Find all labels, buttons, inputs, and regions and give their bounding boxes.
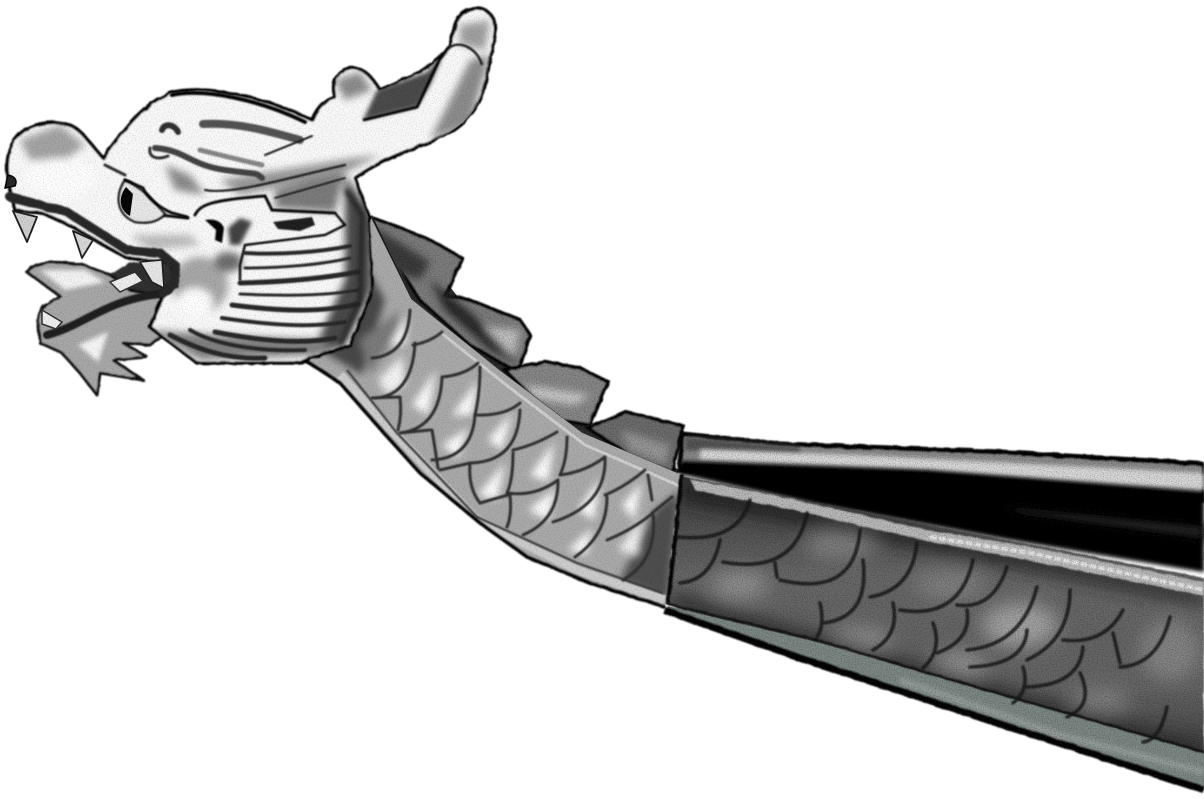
neck: scale boundary — [347, 370, 663, 593]
neck: upper trim — [440, 332, 682, 487]
head: horn tip seam — [450, 45, 482, 65]
head: forehead streaks — [155, 93, 345, 191]
vent: right — [273, 217, 315, 231]
fin: second — [505, 362, 608, 425]
eye: brow upper — [105, 148, 168, 175]
head: frill stripes — [170, 246, 358, 358]
neck: body — [300, 215, 680, 607]
tooth: front lower — [42, 310, 62, 329]
jaw: beard highlight — [78, 332, 108, 362]
tooth: molars — [110, 272, 143, 292]
neck: shading and highlights — [320, 215, 682, 600]
hull: side panel — [665, 476, 1204, 760]
fin: first — [367, 216, 530, 372]
jaw: lip shadow — [47, 294, 160, 335]
neck: ridge dark line — [372, 215, 680, 472]
lower jaw and beard — [27, 262, 180, 395]
neck: lower pale strip — [340, 375, 665, 600]
head: silhouette — [7, 8, 495, 363]
boat hull — [664, 434, 1204, 790]
hull: keel colour — [666, 606, 1204, 790]
vent: middle — [228, 218, 252, 245]
neck — [300, 215, 682, 607]
eye — [105, 148, 187, 223]
hull: light rail highlight — [700, 449, 1204, 490]
hull: grey band in the shadow — [1000, 505, 1204, 540]
hull: top grey shade — [685, 437, 800, 456]
head: horn lower edge — [363, 52, 443, 120]
hull: panel tonal patches — [670, 480, 1204, 765]
jaw: tongue highlight — [40, 270, 105, 290]
head: tonal shading — [20, 20, 490, 360]
cheek vents — [205, 217, 315, 245]
tooth: upper second — [73, 231, 93, 258]
hull: bright trim stroke — [930, 537, 1204, 590]
jaw: mouth interior — [110, 262, 178, 315]
dorsal fins — [367, 216, 683, 480]
nostril — [5, 175, 16, 188]
head: horn nub underside — [363, 55, 443, 120]
eye: brow — [125, 180, 187, 217]
neck: junction post — [668, 474, 682, 604]
tooth: rear upper — [140, 260, 164, 288]
fin shading — [372, 225, 670, 465]
hull: keel top line — [668, 604, 1204, 752]
eye: pupil — [121, 187, 133, 216]
eye: socket — [119, 180, 165, 223]
jaw: tongue and beard shape — [27, 262, 180, 395]
hull: black shadow band — [680, 461, 1204, 572]
neck: scales — [372, 310, 672, 580]
upper lip band — [10, 197, 176, 293]
vent: left — [205, 219, 224, 243]
head: back of head shadow — [340, 190, 362, 345]
tooth: upper front — [13, 211, 37, 242]
dragon head — [5, 8, 495, 363]
hull: top rail — [680, 434, 1204, 500]
hull: scales — [678, 500, 1170, 742]
hull: keel bottom edge — [664, 610, 1204, 790]
head: cheek frame lines — [160, 178, 345, 280]
fin: third — [588, 412, 683, 472]
fin: backing along ridge — [372, 222, 680, 480]
hull: pale trim strip — [690, 479, 1204, 596]
hull: keel sheen — [900, 680, 1204, 772]
neck: outer edge — [300, 357, 665, 607]
